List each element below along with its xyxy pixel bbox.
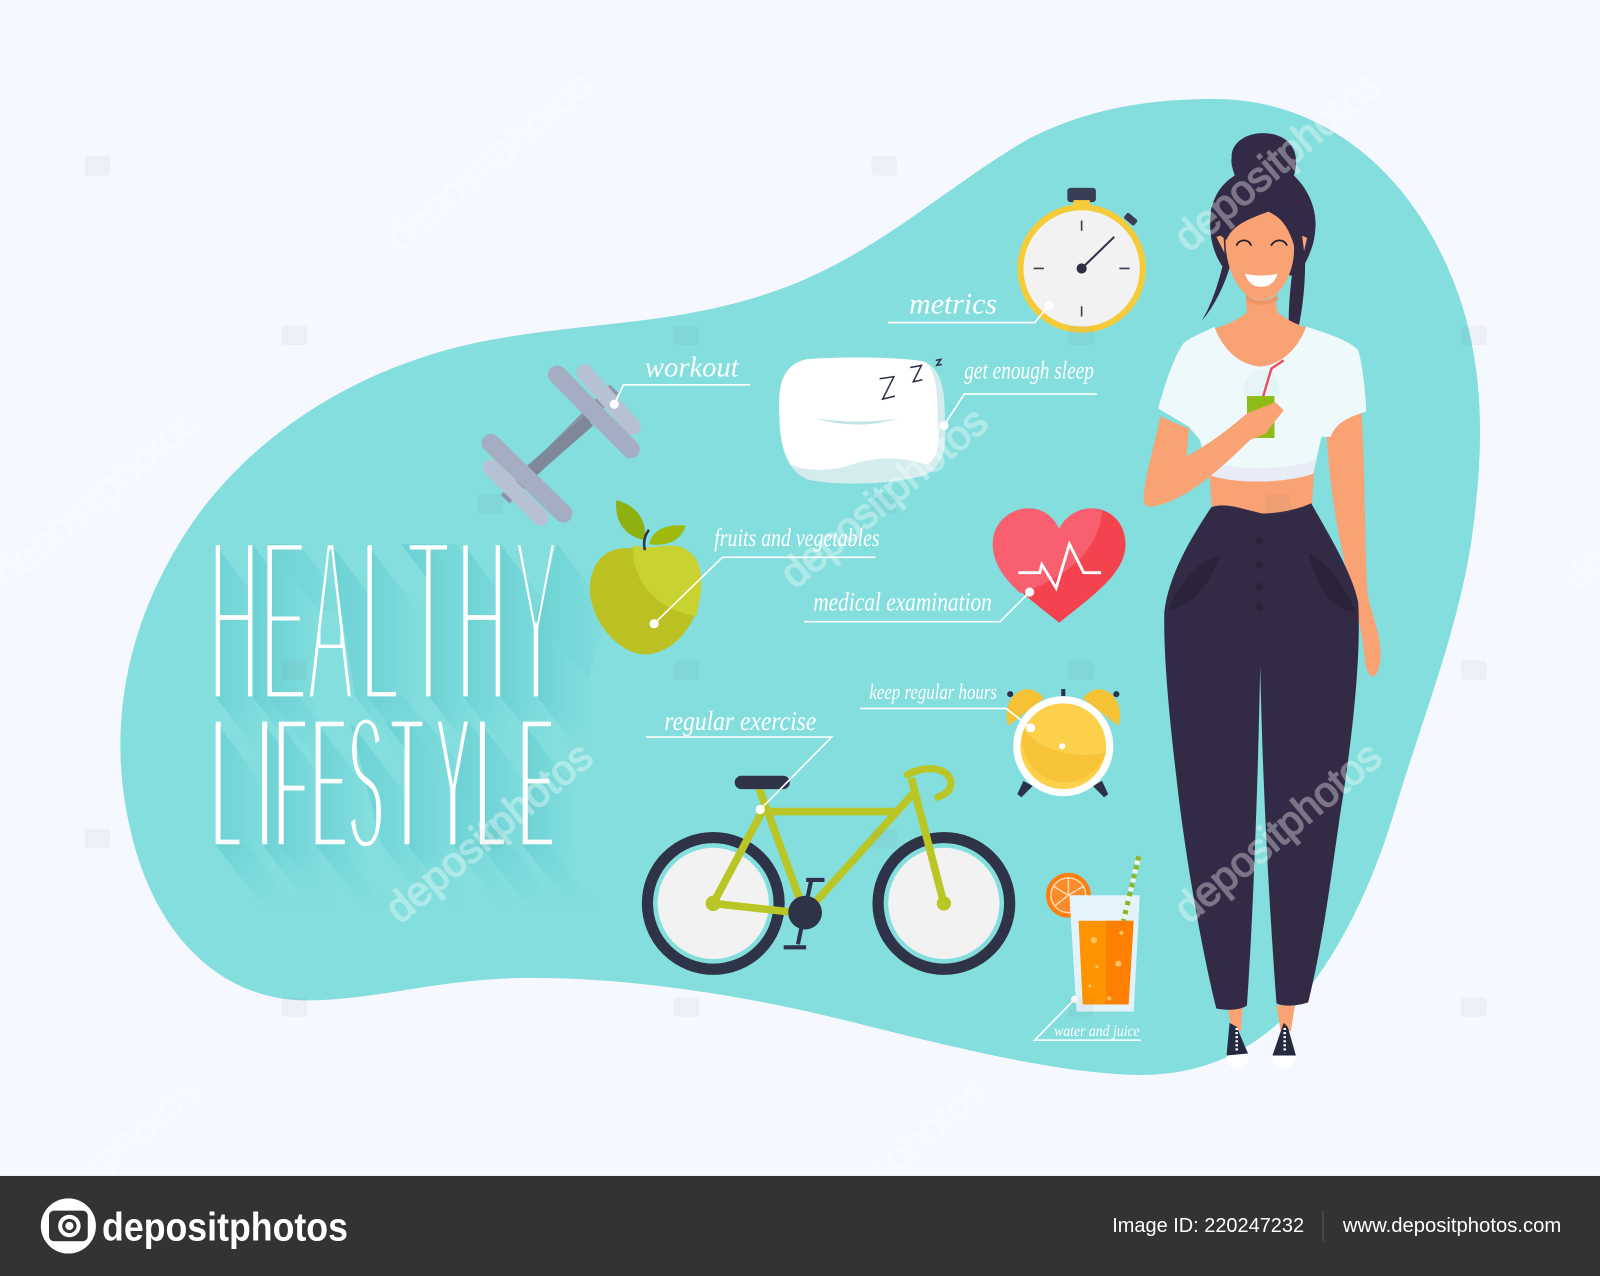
- trousers: [1164, 503, 1359, 1010]
- watermark: depositphotos repeats: depositphotos: [770, 1067, 996, 1267]
- callout: fruits and vegetables: [649, 523, 880, 628]
- icon: juice glass: [1046, 856, 1140, 1012]
- title: HEALTHY: HEALTHY: [209, 487, 559, 755]
- callout: keep regular hours: [860, 679, 1035, 732]
- neck shadow: [1246, 294, 1278, 305]
- icon: bicycle: [647, 769, 1010, 969]
- footer website: www.depositphotos.com: [1342, 1215, 1561, 1237]
- callout: medical examination: medical examination: [813, 586, 992, 616]
- ears: [1216, 235, 1307, 253]
- callout: regular exercise: regular exercise: [664, 705, 816, 736]
- hair fringe: [1216, 180, 1304, 245]
- watermark: depositphotos repeats: depositphotos: [376, 732, 601, 932]
- face: [1225, 211, 1294, 300]
- icon: alarm clock: [1007, 689, 1120, 797]
- callout: get enough sleep: get enough sleep: [964, 356, 1094, 385]
- smile: [1245, 274, 1278, 287]
- callout: water and juice: [1035, 996, 1141, 1040]
- callout: get enough sleep: [939, 356, 1097, 430]
- pockets and buttons: [1169, 553, 1355, 612]
- callout: water and juice: water and juice: [1054, 1023, 1140, 1040]
- legs at ankles: [1228, 1005, 1295, 1031]
- footer bar: [0, 1176, 1600, 1276]
- footer logo icon: camera: [41, 1198, 96, 1254]
- callout: workout: [610, 353, 750, 409]
- left arm: [1144, 402, 1284, 506]
- watermark: depositphotos repeats: depositphotos: [770, 397, 996, 597]
- callout: metrics: metrics: [909, 288, 997, 320]
- watermark: camera marks: [85, 156, 1487, 1017]
- callout: workout: workout: [645, 353, 740, 384]
- footer image id: Image ID: 220247232: [1112, 1215, 1304, 1237]
- title long shadow: lifestyle: [215, 722, 562, 878]
- teal blob panel: [120, 99, 1480, 1075]
- icon: heart: [993, 508, 1126, 623]
- hair back and bun: [1202, 133, 1316, 351]
- icon: pillow: [779, 358, 945, 484]
- watermark: depositphotos repeats: depositphotos: [376, 60, 601, 260]
- watermark: depositphotos repeats: depositphotos: [1164, 60, 1390, 260]
- shoes: [1226, 1023, 1296, 1068]
- drink cup: [1243, 360, 1284, 438]
- right arm: [1327, 412, 1381, 677]
- icon: apple: [590, 500, 701, 654]
- t-shirt: [1158, 327, 1366, 482]
- character: woman holding a drink: [1144, 133, 1381, 1068]
- icon: stopwatch: [1017, 188, 1146, 333]
- torso skin: [1207, 300, 1316, 516]
- watermark: depositphotos repeats: depositphotos: [1164, 732, 1390, 932]
- callout: keep regular hours: keep regular hours: [869, 679, 997, 704]
- callout: metrics: [888, 288, 1054, 323]
- callout: regular exercise: [646, 705, 832, 814]
- footer logo wordmark: depositphotos: [102, 1205, 348, 1249]
- title: LIFESTYLE: LIFESTYLE: [211, 676, 554, 892]
- eyes: [1237, 240, 1287, 245]
- callout: fruits and vegetables: fruits and vegetables: [714, 523, 880, 552]
- title long shadow: healthy: [215, 544, 583, 732]
- icon: dumbbell: [491, 373, 633, 518]
